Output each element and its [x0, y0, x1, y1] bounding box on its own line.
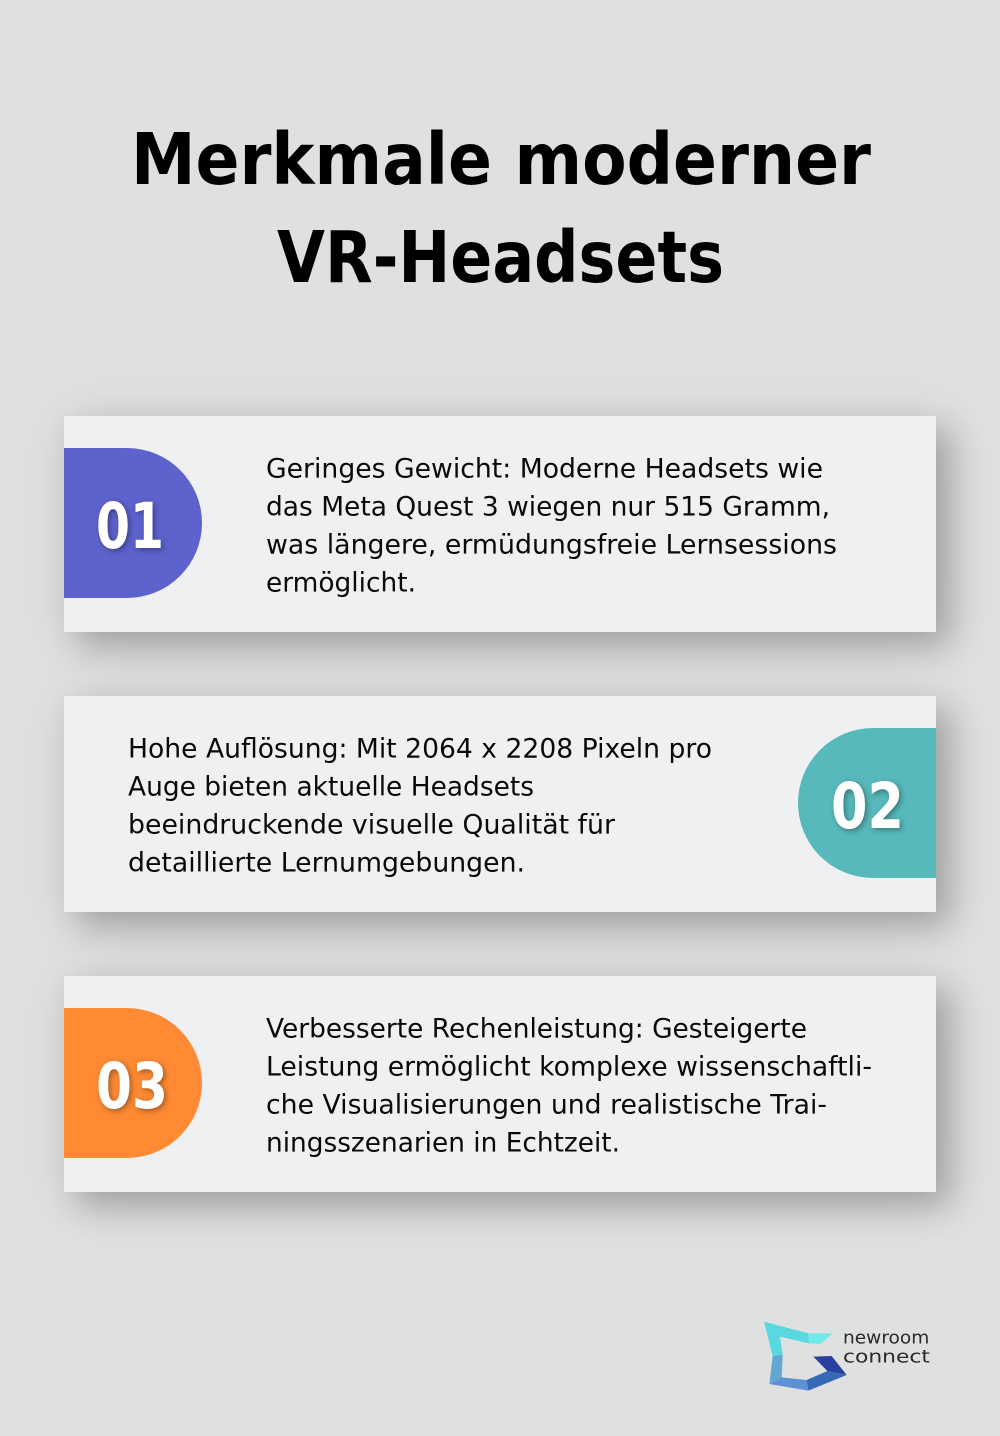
text: Verbesserte Rechenleistung: ningsszenarien in Echtzeit.	[266, 1128, 620, 1158]
text: Hohe Auflösung: beeindruckende visuelle Qualität für	[128, 810, 616, 840]
text: Hohe Auflösung: detaillierte Lernumgebungen.	[128, 848, 525, 878]
title	[131, 118, 871, 299]
text: Geringes Gewicht	[266, 454, 837, 598]
panel: card 02	[64, 696, 936, 912]
text: Hohe Auflösung	[128, 734, 712, 878]
panel: card 01	[64, 416, 936, 632]
text: Geringes Gewicht: das Meta Quest 3 wiegen nur 515 Gramm,	[266, 492, 830, 522]
logo: newroom connect: connect	[843, 1346, 930, 1367]
title: Merkmale moderner	[131, 118, 871, 201]
number 02: 02	[831, 770, 904, 843]
text: Verbesserte Rechenleistung: Verbesserte Rechenleistung: Gesteigerte	[266, 1014, 807, 1044]
badge 03	[64, 1008, 202, 1158]
text: Geringes Gewicht: ermöglicht.	[266, 568, 416, 598]
text: Geringes Gewicht: was längere, ermüdungsfreie Lernsessions	[266, 530, 837, 560]
badge 02	[798, 728, 936, 878]
panel: card 03	[64, 976, 936, 1192]
logo: newroom connect: newroom	[843, 1327, 929, 1348]
badge 01	[64, 448, 202, 598]
text: Verbesserte Rechenleistung: che Visualisierungen und realistische Trai-	[266, 1090, 827, 1120]
text: Hohe Auflösung: Auge bieten aktuelle Headsets	[128, 772, 534, 802]
text: Verbesserte Rechenleistung: Leistung ermöglicht komplexe wissenschaftli-	[266, 1052, 872, 1082]
text: Hohe Auflösung: Hohe Auflösung: Mit 2064 x 2208 Pixeln pro	[128, 734, 712, 764]
number 03: 03	[96, 1050, 168, 1123]
text: Verbesserte Rechenleistung	[266, 1014, 872, 1158]
logo: newroom connect	[764, 1322, 930, 1391]
text: Geringes Gewicht: Geringes Gewicht: Moderne Headsets wie	[266, 454, 823, 484]
number 01: 01	[96, 490, 164, 563]
title: VR-Headsets	[277, 216, 724, 299]
